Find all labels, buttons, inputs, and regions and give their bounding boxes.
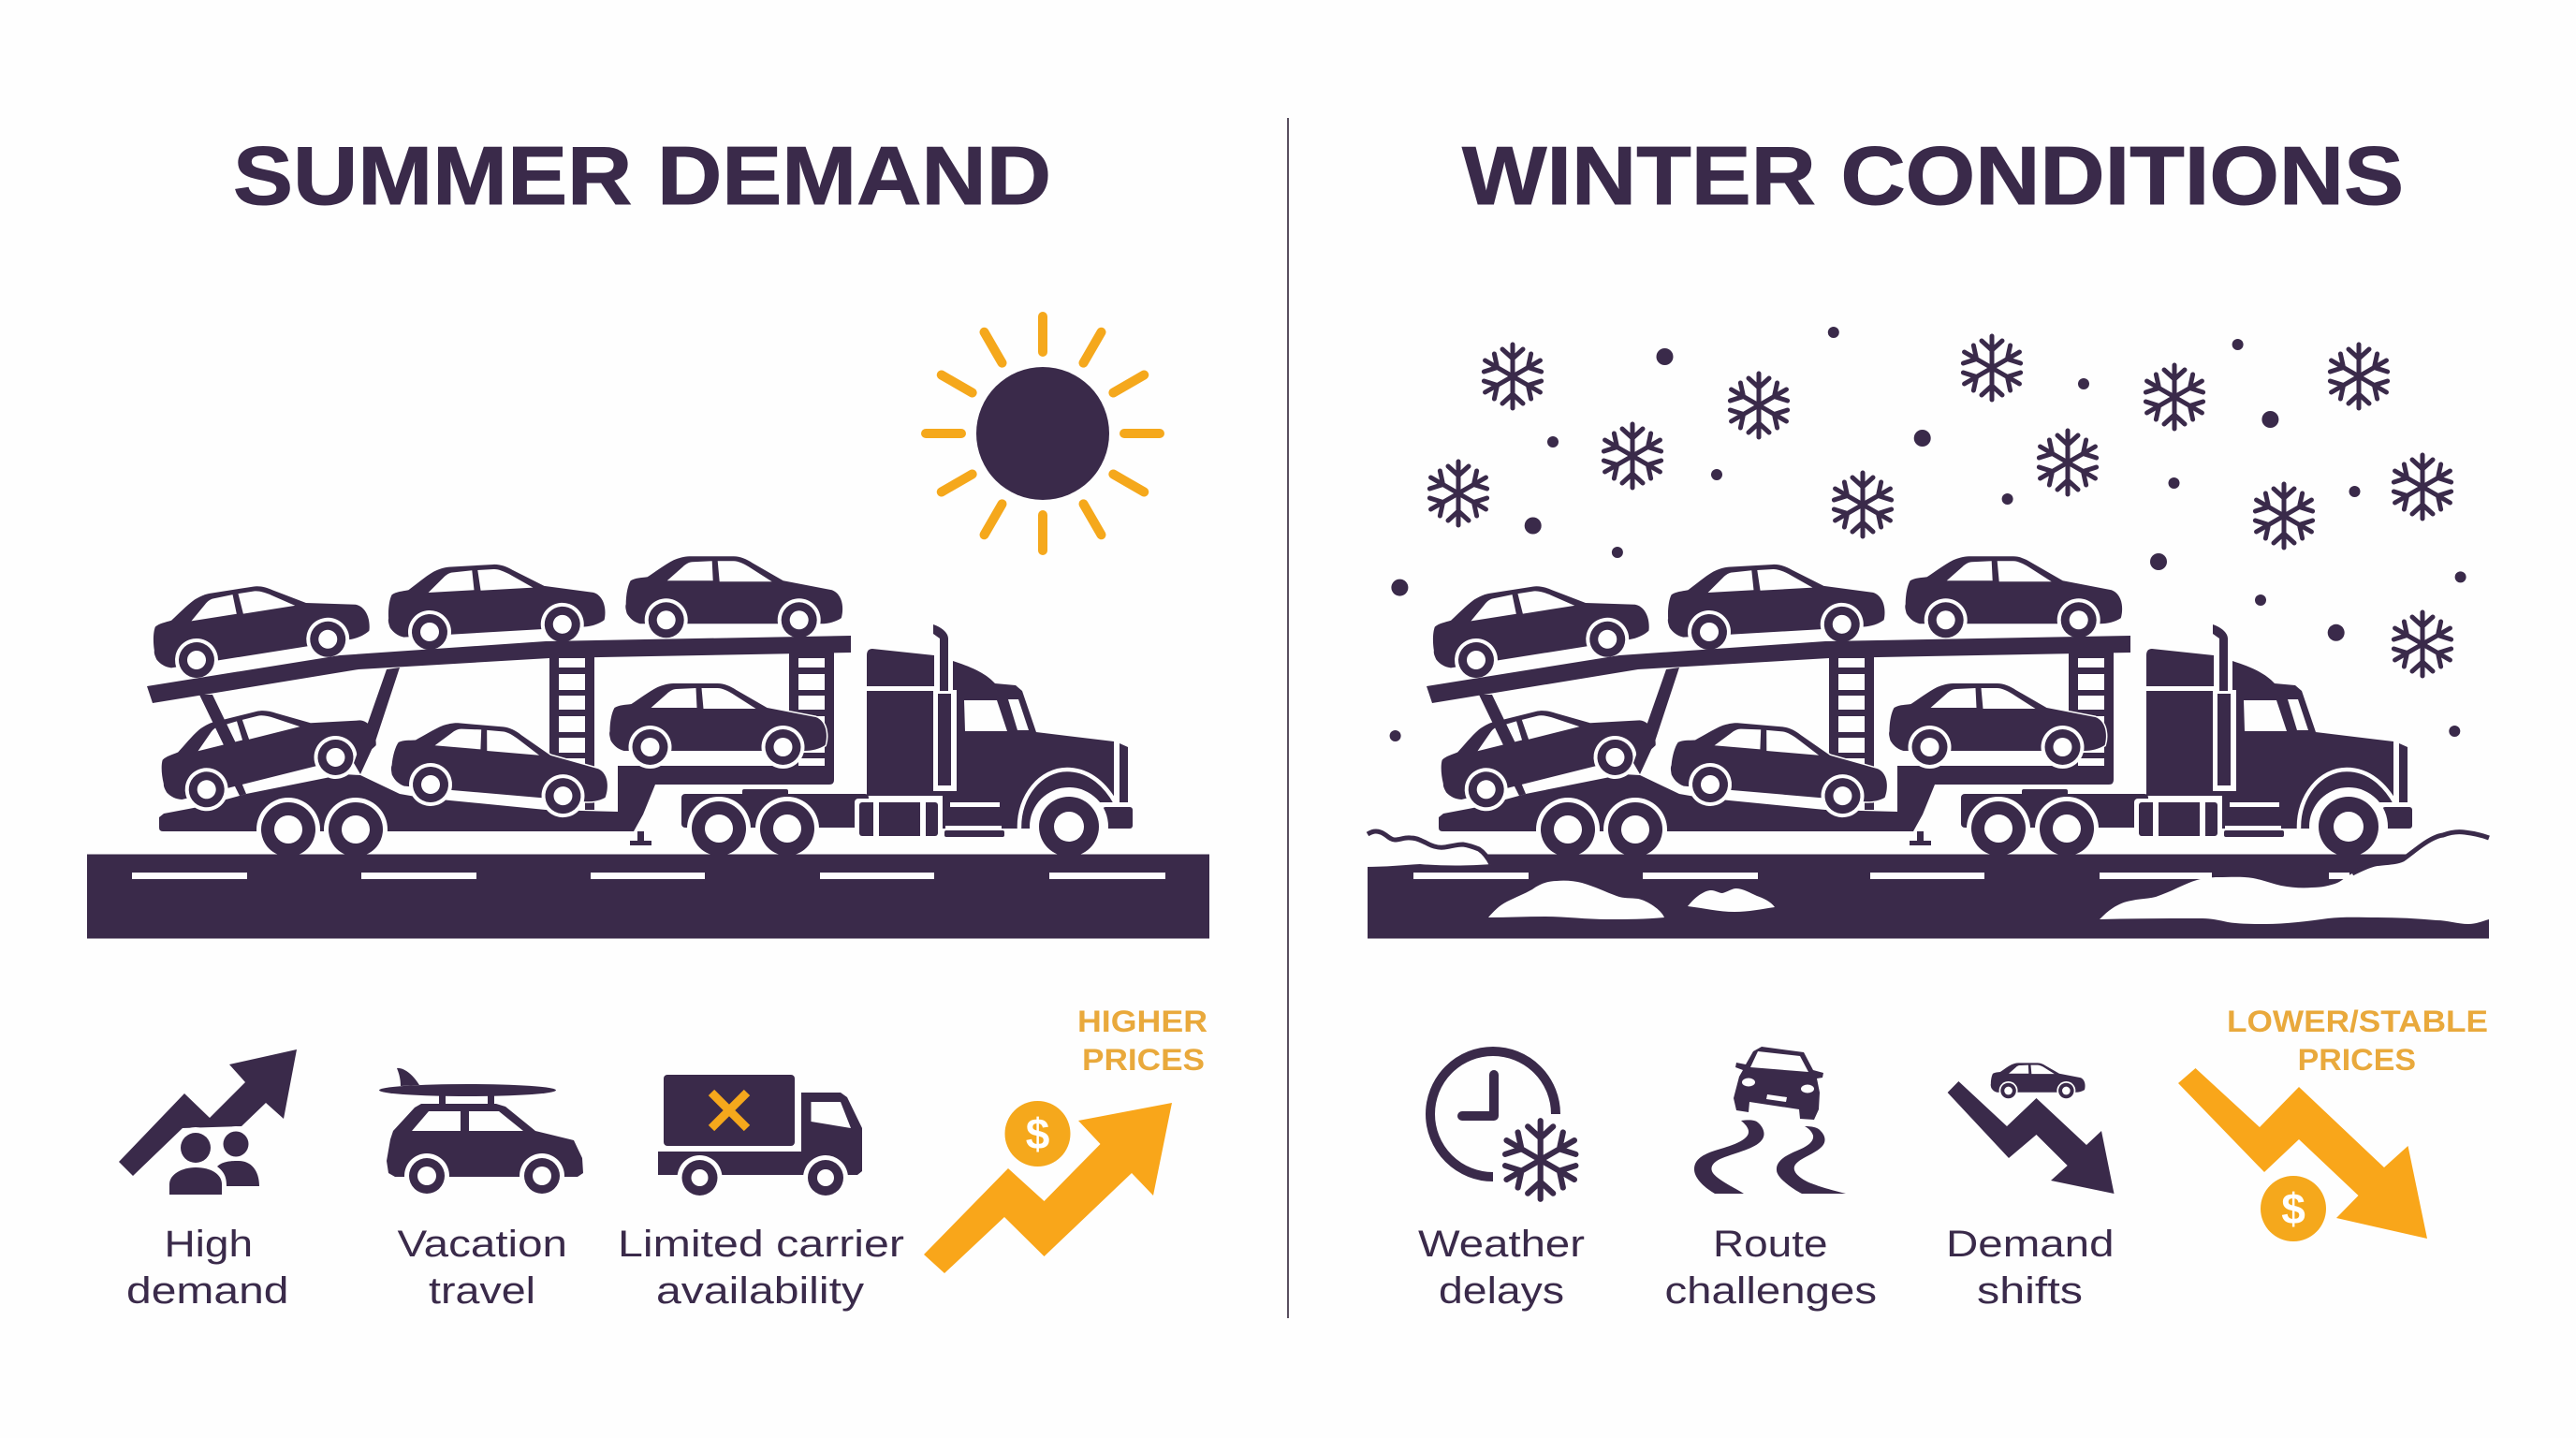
icon: falling price arrow: $: [2281, 1184, 2305, 1233]
car carrier truck: winter: [1426, 556, 2412, 866]
label: weather delays: delays: [1439, 1270, 1564, 1312]
snowfall: [1390, 327, 2466, 741]
label: higher prices: HIGHER: [1077, 1005, 1208, 1038]
road with snow: winter: [1365, 831, 2489, 938]
cab details: [855, 691, 1029, 838]
upper deck: [147, 636, 851, 703]
ladders: [549, 653, 834, 810]
label: route challenges: challenges: [1664, 1270, 1877, 1312]
label: lower/stable prices: LOWER/STABLE: [2227, 1005, 2488, 1038]
label: higher prices: PRICES: [1082, 1043, 1205, 1077]
icon: car with surfboard: [379, 1068, 583, 1198]
tractor chassis and cab: [681, 624, 1133, 829]
label: high demand: demand: [126, 1270, 288, 1312]
road: summer: [87, 854, 1209, 938]
title: summer demand: SUMMER DEMAND: [233, 129, 1051, 222]
icon: rising price arrow: $: [1026, 1109, 1049, 1158]
label: weather delays: [1418, 1224, 1585, 1312]
label: vacation travel: [397, 1224, 567, 1312]
label: demand shifts: [1946, 1224, 2114, 1312]
car carrier truck: summer: [146, 556, 1133, 866]
center divider line: [1287, 118, 1289, 1318]
label: vacation travel: Vacation: [397, 1224, 567, 1265]
label: limited carrier availability: Limited carrier: [618, 1224, 904, 1265]
icon: rising price arrow: [924, 1097, 1172, 1273]
label: lower/stable prices: [2227, 1005, 2488, 1077]
label: route challenges: Route: [1713, 1224, 1827, 1265]
label: vacation travel: travel: [429, 1270, 535, 1312]
upper cars: [146, 556, 842, 688]
snow drift lines: [1368, 831, 1491, 864]
label: weather delays: Weather: [1418, 1224, 1585, 1265]
icon: high demand: [119, 1049, 297, 1195]
icon: falling price arrow: [2178, 1068, 2427, 1245]
label: route challenges: [1664, 1224, 1877, 1312]
landing gear and wheels: [261, 797, 1099, 857]
label: demand shifts: Demand: [1946, 1224, 2114, 1265]
label: high demand: High: [165, 1224, 253, 1265]
label: limited carrier availability: availability: [656, 1270, 864, 1312]
label: lower/stable prices: PRICES: [2298, 1043, 2416, 1077]
label: limited carrier availability: [618, 1224, 904, 1312]
icon: weather delays clock: [1430, 1051, 1581, 1199]
icon: delivery truck with x: [658, 1075, 862, 1200]
snow dots: [1390, 327, 2466, 741]
trailer frame: [159, 766, 834, 831]
icon: demand shifts: [1948, 1063, 2114, 1194]
label: high demand: [126, 1224, 288, 1312]
lower cars: [152, 683, 827, 821]
label: higher prices: [1077, 1005, 1208, 1077]
deck struts: [199, 668, 400, 796]
snow patches: [1365, 832, 2489, 924]
snowflakes: [1426, 336, 2455, 676]
wheel halos: [256, 787, 1108, 866]
label: demand shifts: shifts: [1977, 1270, 2083, 1312]
icon: sun: [926, 316, 1160, 550]
icon: route challenges: [1694, 1047, 1846, 1194]
title: winter conditions: WINTER CONDITIONS: [1462, 129, 2404, 222]
